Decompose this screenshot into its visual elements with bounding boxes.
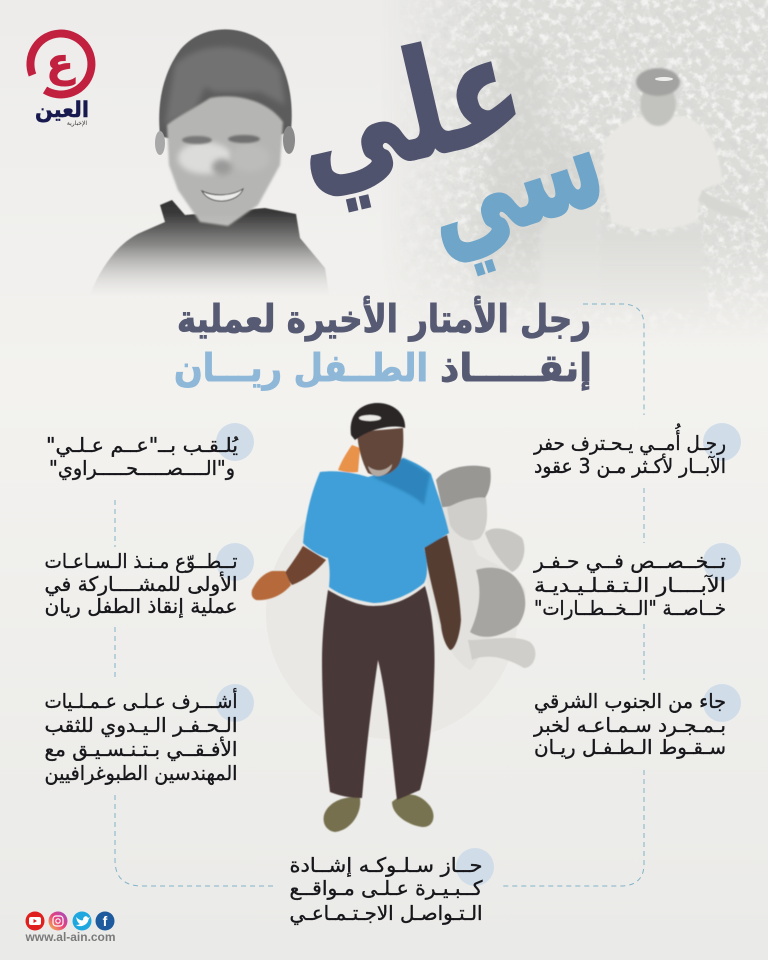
face: [357, 428, 403, 476]
text block: praised on social media: كــبـيـرة عـلـى مـواقــع: [290, 876, 483, 900]
dashed connector lines: [115, 304, 644, 886]
heading line 1: رجل الأمتار الأخيرة لعملية: [177, 295, 591, 341]
left arm and hand: [284, 546, 326, 585]
website url: www.al-ain.com: [24, 932, 116, 944]
cap: [351, 403, 405, 440]
text block: illiterate well digger: [533, 423, 726, 478]
shirt: [303, 458, 449, 603]
icon: youtube: [26, 912, 44, 930]
text block: praised on social media: حــاز سـلـوكـه إشــادة: [290, 853, 482, 878]
text block: volunteered: تــطــوّع مـنـذ الـسـاعـات: [44, 549, 238, 573]
icon: instagram: [48, 912, 68, 930]
text block: illiterate well digger: رجـل أُمــي يـحـترف حفر: [533, 423, 726, 456]
logo ring: [30, 34, 91, 95]
text block: praised on social media: الـتـواصـل الاجـتـمـاعـي: [290, 901, 482, 926]
text block: volunteered: عملية إنقاذ الطفل ريان: [44, 594, 237, 619]
text block: supervised digging: المهندسين الطبوغرافيين: [44, 761, 238, 785]
icon: facebook: f: [103, 913, 108, 929]
title: si Ali calligraphy: [277, 0, 621, 284]
text block: praised on social media: [290, 853, 483, 926]
text block: traditional wells: الآبــــار الـتـقـلـيـديـة: [534, 573, 726, 597]
text block: came from the south east: جاء من الجنوب الشرقي: [534, 689, 726, 714]
heading: [174, 295, 592, 391]
trousers: [322, 586, 435, 800]
backdrop circle: [266, 487, 518, 739]
scarf: [338, 445, 360, 472]
text block: supervised digging: [44, 688, 238, 785]
text block: volunteered: [44, 549, 238, 619]
photo: man in blue shirt: [252, 403, 461, 832]
text block: volunteered: الأولى للمشــــاركة في: [44, 572, 238, 597]
text block: came from the south east: سـقـوط الـطـفـل ريـان: [534, 735, 726, 759]
photo: boy Rayan: [88, 29, 330, 300]
ghost figure of crouching man: [425, 466, 535, 670]
right arm: [424, 535, 461, 650]
text block: came from the south east: بـمـجـرد سـمـاعـه لخبر: [533, 713, 726, 737]
text block: traditional wells: تــخــصــص فــي حـفـر: [533, 549, 726, 574]
text block: traditional wells: خــاصــة "الــخــطــارات": [534, 596, 726, 620]
icon: twitter: [72, 912, 92, 930]
logo letter: ع: [46, 40, 75, 86]
shoes: [324, 797, 360, 832]
social icons: [24, 912, 116, 944]
logo: Al-Ain News: [30, 34, 91, 127]
text block: supervised digging: الأفـقــي بـتـنـسـيـق مع: [44, 737, 238, 762]
text block: supervised digging: أشـــرف عـلـى عـمـلـيات: [44, 688, 238, 713]
heading line 2 blue words: الطــفل ريـــان: [174, 346, 428, 390]
text block: supervised digging: الـحـفـر الـيـدوي للثقب: [44, 713, 238, 738]
title word: Si: سي: [402, 79, 621, 284]
logo tagline: الإخبارية: [67, 120, 87, 127]
text block: traditional wells: [533, 549, 726, 620]
text block: nickname: [46, 433, 238, 481]
text block: nickname: يُلـقـب بــ"عــم عـلـي": [46, 433, 238, 458]
background photo: rocks and faint man: [403, 0, 768, 307]
logo wordmark: العين: [35, 98, 89, 123]
text block: came from the south east: [533, 689, 726, 759]
text block: illiterate well digger: الآبــار لأكـثر مـن 3 عقود: [534, 454, 726, 478]
text block: nickname: و"الــــصـــــحـــــراوي": [49, 456, 235, 481]
title word: Ali: علي: [277, 0, 538, 219]
bullet circles: [216, 423, 741, 886]
heading line 2 dark word: إنقـــــاذ: [440, 346, 592, 391]
